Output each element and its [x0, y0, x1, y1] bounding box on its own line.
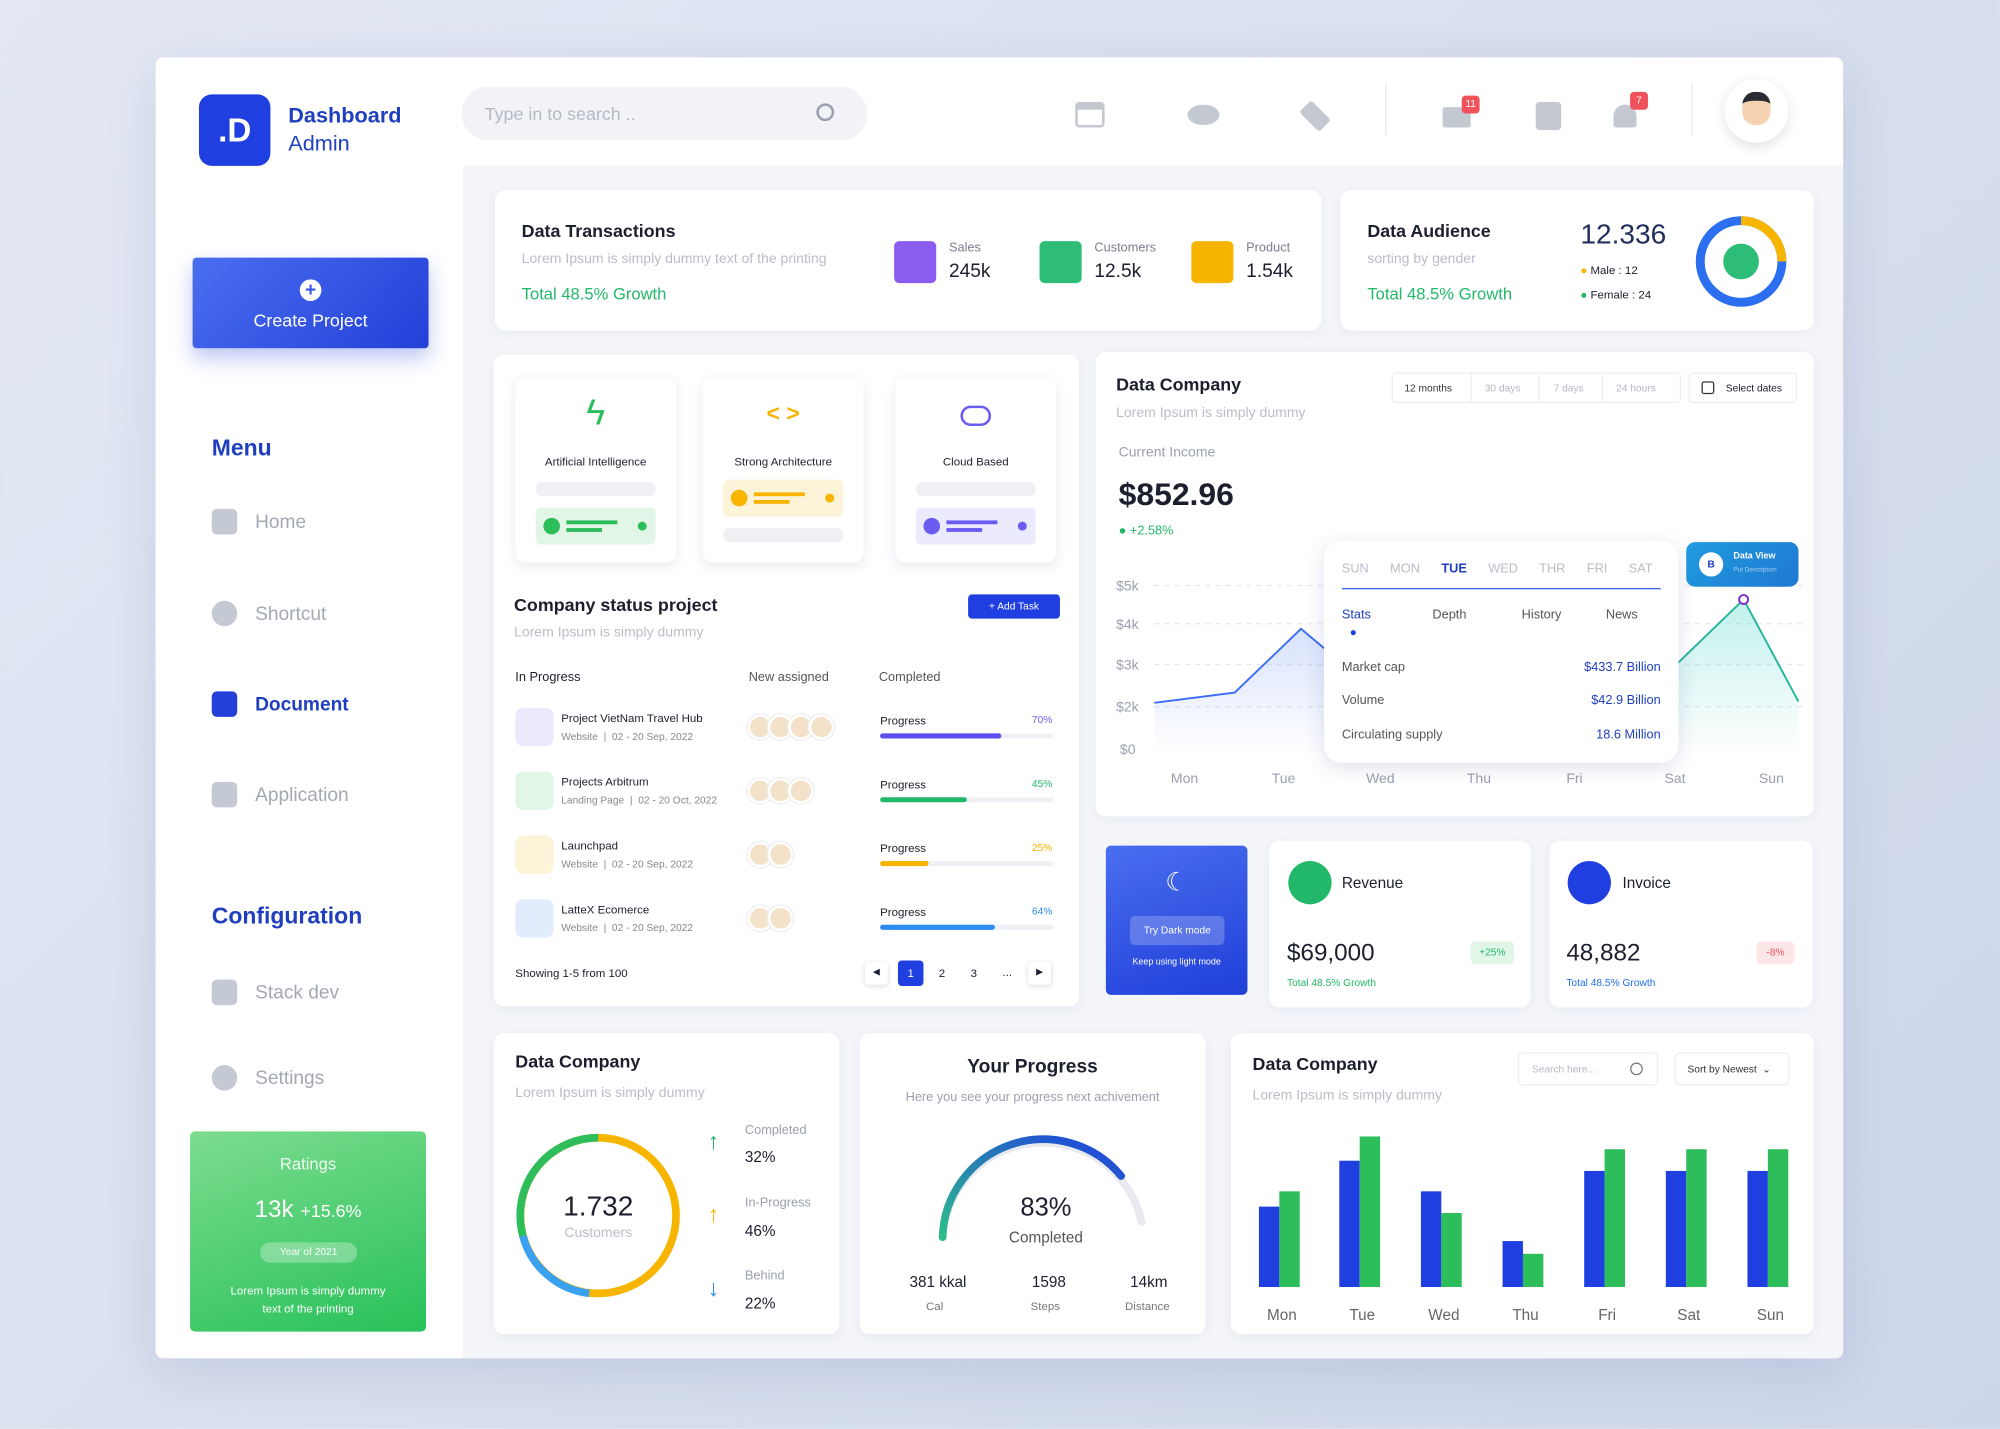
- stat: product: [1191, 241, 1293, 284]
- project rows: Website | 02 - 20 Sep, 2022: [561, 858, 693, 870]
- card: data company chart: Lorem Ipsum is simply dummy: [1116, 406, 1306, 421]
- card: features and company status: Completed: [879, 671, 941, 685]
- line chart: Thu: [1467, 770, 1491, 786]
- header icons: 7: [1636, 94, 1642, 106]
- range tabs: 30 days: [1485, 383, 1520, 394]
- card: your progress: 381 kkal: [909, 1273, 966, 1291]
- line chart: [1116, 578, 1802, 786]
- card: data company chart: [1096, 352, 1814, 816]
- logo: [198, 94, 402, 166]
- popup stats: $433.7 Billion: [1584, 661, 1661, 675]
- project rows: Progress: [880, 906, 926, 918]
- card: data company chart: $852.96: [1119, 477, 1234, 513]
- card: data audience: 12.336: [1580, 218, 1666, 250]
- dark mode card: ☾: [1165, 869, 1188, 897]
- dark mode card: [1106, 846, 1247, 995]
- card: data company donut: In-Progress: [745, 1196, 811, 1210]
- project rows: 25%: [1032, 842, 1052, 853]
- invoice card: -8%: [1766, 946, 1785, 958]
- line chart: $5k: [1116, 578, 1140, 594]
- card: your progress: 14km: [1130, 1273, 1168, 1291]
- bar chart: Mon: [1267, 1307, 1297, 1324]
- feature: strong architecture: < >: [767, 401, 800, 426]
- configuration heading: Configuration: [212, 903, 362, 929]
- card: data transactions: Data Transactions: [522, 221, 676, 241]
- project rows: Progress: [880, 778, 926, 791]
- menu item stack dev: [212, 980, 339, 1006]
- line chart: Mon: [1171, 770, 1198, 786]
- project rows: Landing Page | 02 - 20 Oct, 2022: [561, 795, 717, 806]
- project rows: Progress: [880, 842, 926, 855]
- card: data audience: ● Female : 24: [1580, 288, 1651, 301]
- ratings card: Lorem Ipsum is simply dummy: [231, 1284, 386, 1297]
- popup stats: History: [1522, 608, 1561, 622]
- card: data company donut: 32%: [745, 1148, 776, 1166]
- card: data audience: sorting by gender: [1367, 251, 1476, 267]
- line chart: Sun: [1759, 770, 1784, 786]
- card: data company donut: [494, 1033, 839, 1334]
- range tabs: 24 hours: [1616, 383, 1656, 394]
- revenue card: [1269, 841, 1531, 1008]
- create project button: Create Project: [254, 310, 368, 330]
- select dates: [1689, 372, 1797, 403]
- pagination: ...: [1003, 966, 1012, 978]
- bar chart: Fri: [1598, 1307, 1616, 1324]
- menu item shortcut: [212, 600, 326, 626]
- range tabs: [1392, 372, 1681, 403]
- card: your progress: Completed: [1009, 1228, 1083, 1246]
- ratings card: [190, 1131, 426, 1332]
- add task button: [968, 594, 1060, 619]
- popup stats: Market cap: [1342, 661, 1405, 675]
- card: data company donut: ↑: [708, 1129, 719, 1154]
- popup stats: Volume: [1342, 694, 1384, 708]
- card: data company donut: ↑: [708, 1202, 719, 1227]
- project rows: 45%: [1032, 778, 1052, 790]
- data view callout: Put Description: [1733, 566, 1777, 574]
- card: data company donut: Data Company: [515, 1051, 640, 1071]
- search bar: Type in to search ..: [485, 103, 636, 124]
- create project button: [193, 258, 429, 348]
- card: your progress: [860, 1033, 1205, 1334]
- project rows: Website | 02 - 20 Sep, 2022: [561, 922, 693, 934]
- line chart: $2k: [1116, 699, 1140, 715]
- menu item home: Home: [255, 511, 306, 533]
- project rows: Projects Arbitrum: [561, 776, 649, 788]
- bar chart: Sun: [1757, 1307, 1784, 1324]
- card: data audience: [1341, 190, 1814, 330]
- card: data audience: ● Male : 12: [1580, 264, 1638, 277]
- menu item document: Document: [255, 693, 349, 715]
- invoice card: [1550, 841, 1812, 1008]
- card: data company donut: ↓: [708, 1276, 719, 1301]
- card: your progress: Steps: [1031, 1300, 1060, 1312]
- card: data company bar chart: Data Company: [1253, 1054, 1378, 1074]
- project rows: Launchpad: [561, 839, 618, 852]
- ratings card: 13k +15.6%: [255, 1196, 361, 1223]
- ratings card: Year of 2021: [280, 1246, 337, 1258]
- add task button: + Add Task: [989, 601, 1039, 612]
- line chart: $4k: [1116, 616, 1140, 632]
- main dashboard frame: [156, 57, 1843, 1358]
- project rows: 70%: [1032, 714, 1052, 726]
- card: data company bar chart: Search here...: [1532, 1064, 1596, 1075]
- company status heading: Company status project: [514, 594, 717, 615]
- card: data company donut: Lorem Ipsum is simply dummy: [515, 1085, 705, 1101]
- feature: cloud based: Cloud Based: [943, 455, 1009, 468]
- card: data company chart: Data Company: [1116, 374, 1241, 394]
- audience donut: [1696, 216, 1786, 307]
- logo: Admin: [288, 131, 350, 156]
- line chart: Fri: [1566, 770, 1583, 786]
- card: your progress: Cal: [926, 1300, 943, 1312]
- menu item application: [212, 782, 349, 808]
- card: data audience: Data Audience: [1367, 221, 1491, 241]
- card: features and company status: New assigned: [749, 671, 829, 685]
- card: data company chart: ● +2.58%: [1119, 524, 1173, 538]
- card: your progress: Your Progress: [967, 1056, 1098, 1078]
- card: data company donut: 46%: [745, 1222, 776, 1240]
- card: data transactions: [495, 190, 1321, 330]
- card: your progress: Distance: [1125, 1300, 1170, 1312]
- line chart: Wed: [1366, 770, 1395, 786]
- stat: product: 1.54k: [1246, 260, 1293, 282]
- revenue card: $69,000: [1287, 940, 1375, 967]
- feature: strong architecture: [703, 378, 864, 562]
- project rows: [515, 708, 1052, 938]
- pagination: ◀: [873, 968, 880, 977]
- card: your progress: 1598: [1032, 1273, 1066, 1291]
- menu item application: Application: [255, 784, 349, 805]
- stat: product: Product: [1246, 241, 1290, 255]
- bar chart: Tue: [1349, 1307, 1375, 1324]
- popup stats: 18.6 Million: [1596, 728, 1661, 742]
- pagination: Showing 1-5 from 100: [515, 967, 628, 980]
- avatar: [1724, 79, 1788, 143]
- stat: sales: Sales: [949, 241, 981, 255]
- bar chart: Sat: [1677, 1307, 1701, 1324]
- project rows: 64%: [1032, 906, 1052, 917]
- invoice card: 48,882: [1566, 940, 1640, 967]
- dark mode card: Keep using light mode: [1132, 958, 1221, 967]
- feature: strong architecture: Strong Architecture: [734, 455, 832, 468]
- project rows: Progress: [880, 714, 926, 727]
- line chart: $0: [1120, 741, 1136, 757]
- card: data company bar chart: Sort by Newest ⌄: [1687, 1064, 1771, 1075]
- donut chart: Customers: [564, 1224, 632, 1240]
- line chart: Sat: [1665, 770, 1686, 786]
- invoice card: Total 48.5% Growth: [1566, 977, 1655, 989]
- line chart: Tue: [1272, 770, 1296, 786]
- project rows: Website | 02 - 20 Sep, 2022: [561, 731, 693, 742]
- card: data company donut: 22%: [745, 1295, 776, 1312]
- card: data company donut: Completed: [745, 1124, 807, 1138]
- menu item document: [212, 691, 349, 717]
- stat: customers: 12.5k: [1094, 260, 1141, 282]
- bar chart: Thu: [1512, 1307, 1539, 1324]
- select dates: Select dates: [1726, 383, 1782, 394]
- popup stats: Stats: [1342, 608, 1371, 622]
- card: data audience: Total 48.5% Growth: [1367, 284, 1512, 304]
- range tabs: 7 days: [1554, 383, 1584, 394]
- menu item home: [212, 508, 306, 534]
- popup stats: Circulating supply: [1342, 728, 1443, 742]
- revenue card: +25%: [1479, 946, 1506, 958]
- card: your progress: 83%: [1020, 1194, 1071, 1222]
- card: data company donut: Behind: [745, 1269, 785, 1283]
- ratings card: text of the printing: [262, 1302, 354, 1315]
- invoice card: Invoice: [1622, 874, 1671, 892]
- card: your progress: Here you see your progress next achivement: [906, 1091, 1159, 1105]
- stat: customers: Customers: [1094, 241, 1156, 255]
- feature: cloud based: [895, 378, 1056, 562]
- popup stats: $42.9 Billion: [1591, 694, 1661, 708]
- project rows: LatteX Ecomerce: [561, 903, 649, 916]
- header icons: 11: [1465, 98, 1476, 110]
- feature: artificial intelligence: [515, 378, 676, 562]
- gauge: [938, 1135, 1146, 1242]
- pagination: 1: [908, 967, 914, 980]
- logo: .D: [218, 111, 251, 149]
- menu item stack dev: Stack dev: [255, 982, 339, 1003]
- range tabs: 12 months: [1404, 383, 1452, 394]
- bar chart: Wed: [1428, 1307, 1459, 1324]
- card: data transactions: Lorem Ipsum is simply dummy text of the printing: [522, 251, 827, 267]
- card: features and company status: In Progress: [515, 671, 581, 685]
- card: data company bar chart: Lorem Ipsum is simply dummy: [1253, 1088, 1442, 1103]
- pagination: 2: [939, 967, 945, 980]
- menu item settings: Settings: [255, 1067, 324, 1089]
- popup stats: [1324, 541, 1679, 763]
- menu item settings: [212, 1065, 324, 1090]
- card: data company bar chart: [1231, 1033, 1814, 1334]
- data view callout: B: [1707, 559, 1715, 570]
- card: data transactions: Total 48.5% Growth: [522, 284, 666, 304]
- menu heading: Menu: [212, 435, 272, 460]
- feature: artificial intelligence: Artificial Intelligence: [545, 455, 646, 468]
- content background: [463, 166, 1843, 1358]
- search bar: [462, 87, 867, 140]
- popup stats: News: [1606, 608, 1638, 622]
- popup stats: SUN MON TUE WED THR FRI SAT: [1342, 562, 1653, 577]
- card: features and company status: [494, 355, 1079, 1006]
- popup stats: Depth: [1432, 608, 1466, 622]
- logo: Dashboard: [288, 103, 402, 128]
- stat: sales: [894, 241, 990, 284]
- data view callout: Data View: [1733, 552, 1775, 561]
- header icons: [1075, 84, 1692, 136]
- dark mode card: Try Dark mode: [1144, 925, 1211, 936]
- stat: customers: [1040, 241, 1156, 284]
- card: data company chart: Current Income: [1119, 445, 1215, 460]
- revenue card: Revenue: [1342, 874, 1403, 892]
- line chart: $3k: [1116, 657, 1140, 673]
- progress bars: [880, 733, 1054, 930]
- stat: sales: 245k: [949, 260, 990, 282]
- bar chart: [1258, 1136, 1788, 1324]
- menu item shortcut: Shortcut: [255, 603, 326, 624]
- feature: artificial intelligence: ϟ: [586, 393, 605, 432]
- create project button: +: [305, 279, 316, 301]
- donut chart: [516, 1134, 680, 1298]
- data view callout: [1686, 542, 1798, 587]
- pagination: 3: [971, 967, 977, 980]
- donut chart: 1.732: [563, 1191, 633, 1222]
- card: features and company status: Lorem Ipsum is simply dummy: [514, 625, 704, 640]
- pagination: [515, 960, 1054, 988]
- revenue card: Total 48.5% Growth: [1287, 977, 1376, 989]
- project rows: Project VietNam Travel Hub: [561, 712, 703, 724]
- pagination: ▶: [1036, 968, 1043, 977]
- ratings card: Ratings: [280, 1154, 336, 1173]
